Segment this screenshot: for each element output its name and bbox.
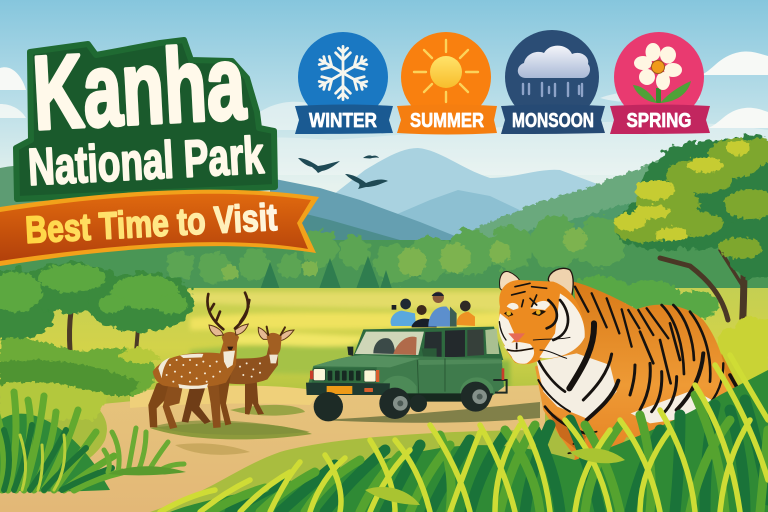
- bird 2: [345, 174, 388, 189]
- ground shadow: [153, 420, 310, 435]
- monsoon label: MONSOON: [512, 110, 594, 132]
- jeep body: [308, 355, 504, 395]
- mid blades: [210, 395, 768, 512]
- foreground grass: left clump: [0, 392, 186, 492]
- monsoon ribbon: [501, 104, 605, 134]
- birds: [298, 155, 388, 189]
- monsoon circle: [505, 30, 599, 124]
- tiger stripes: [538, 287, 753, 453]
- spring label: SPRING: [626, 110, 692, 132]
- chassis: [387, 393, 493, 402]
- ground base: [0, 395, 768, 512]
- trunk: [660, 235, 768, 330]
- meadow: [0, 288, 768, 408]
- tiger body: [535, 282, 733, 488]
- season badge: monsoon: [501, 30, 605, 134]
- sandy path: [0, 385, 545, 512]
- winter circle: [298, 32, 388, 122]
- clouds: [0, 51, 768, 175]
- ribbon text: Best Time to Visit: [24, 197, 278, 252]
- dark blades: [230, 400, 768, 512]
- bumper: [306, 383, 390, 395]
- mid trees behind tiger: [542, 276, 719, 319]
- bird 3: [363, 155, 379, 158]
- winter ribbon: [295, 104, 393, 134]
- left trees: [0, 262, 194, 420]
- ribbon banner: [0, 190, 319, 266]
- title block: [0, 25, 319, 266]
- rear deer: [182, 327, 294, 424]
- season badge: spring: [610, 32, 710, 134]
- spring circle: [614, 32, 704, 122]
- yellow blades: [160, 355, 768, 512]
- right yellow bush: [718, 316, 768, 400]
- title backing shape: [16, 40, 275, 199]
- jeep cabin: [353, 327, 503, 360]
- front deer: [148, 293, 261, 429]
- deer spots: [166, 359, 261, 383]
- right forested hills: [455, 155, 768, 300]
- safari jeep with tourists: [306, 292, 507, 421]
- foliage: [616, 135, 768, 279]
- title: National Park: National Park: [27, 127, 265, 197]
- season badge: summer: [397, 32, 497, 134]
- winter label: WINTER: [309, 110, 377, 132]
- canopy: [0, 262, 194, 341]
- spring ribbon: [610, 104, 710, 134]
- rain cloud icon: [518, 46, 590, 96]
- trunks: [8, 280, 140, 352]
- deer pair: [148, 293, 310, 435]
- right big tree: [614, 135, 768, 330]
- tourists: [391, 292, 475, 327]
- tiger head: [499, 268, 585, 364]
- sun icon: [414, 40, 478, 102]
- flower icon: [633, 43, 691, 103]
- title: Kanha: Kanha: [30, 25, 249, 152]
- tiger chest: [537, 353, 617, 420]
- sky background: [0, 0, 768, 300]
- summer label: SUMMER: [410, 110, 484, 132]
- grille: [312, 367, 377, 383]
- summer circle: [401, 32, 491, 122]
- bird 1: [298, 158, 340, 173]
- summer ribbon: [397, 104, 497, 134]
- tiger tail: [718, 353, 755, 417]
- hedge: [0, 339, 160, 420]
- tiger: [499, 268, 755, 488]
- snowflake icon: [316, 46, 370, 100]
- foreground grass: bottom and right: [160, 355, 768, 512]
- season badge: winter: [295, 32, 393, 134]
- wheels: [314, 382, 491, 421]
- far forest band: [0, 216, 768, 300]
- broad leaves: [365, 448, 625, 505]
- small clump: [104, 428, 184, 472]
- distant mountains: [0, 148, 600, 262]
